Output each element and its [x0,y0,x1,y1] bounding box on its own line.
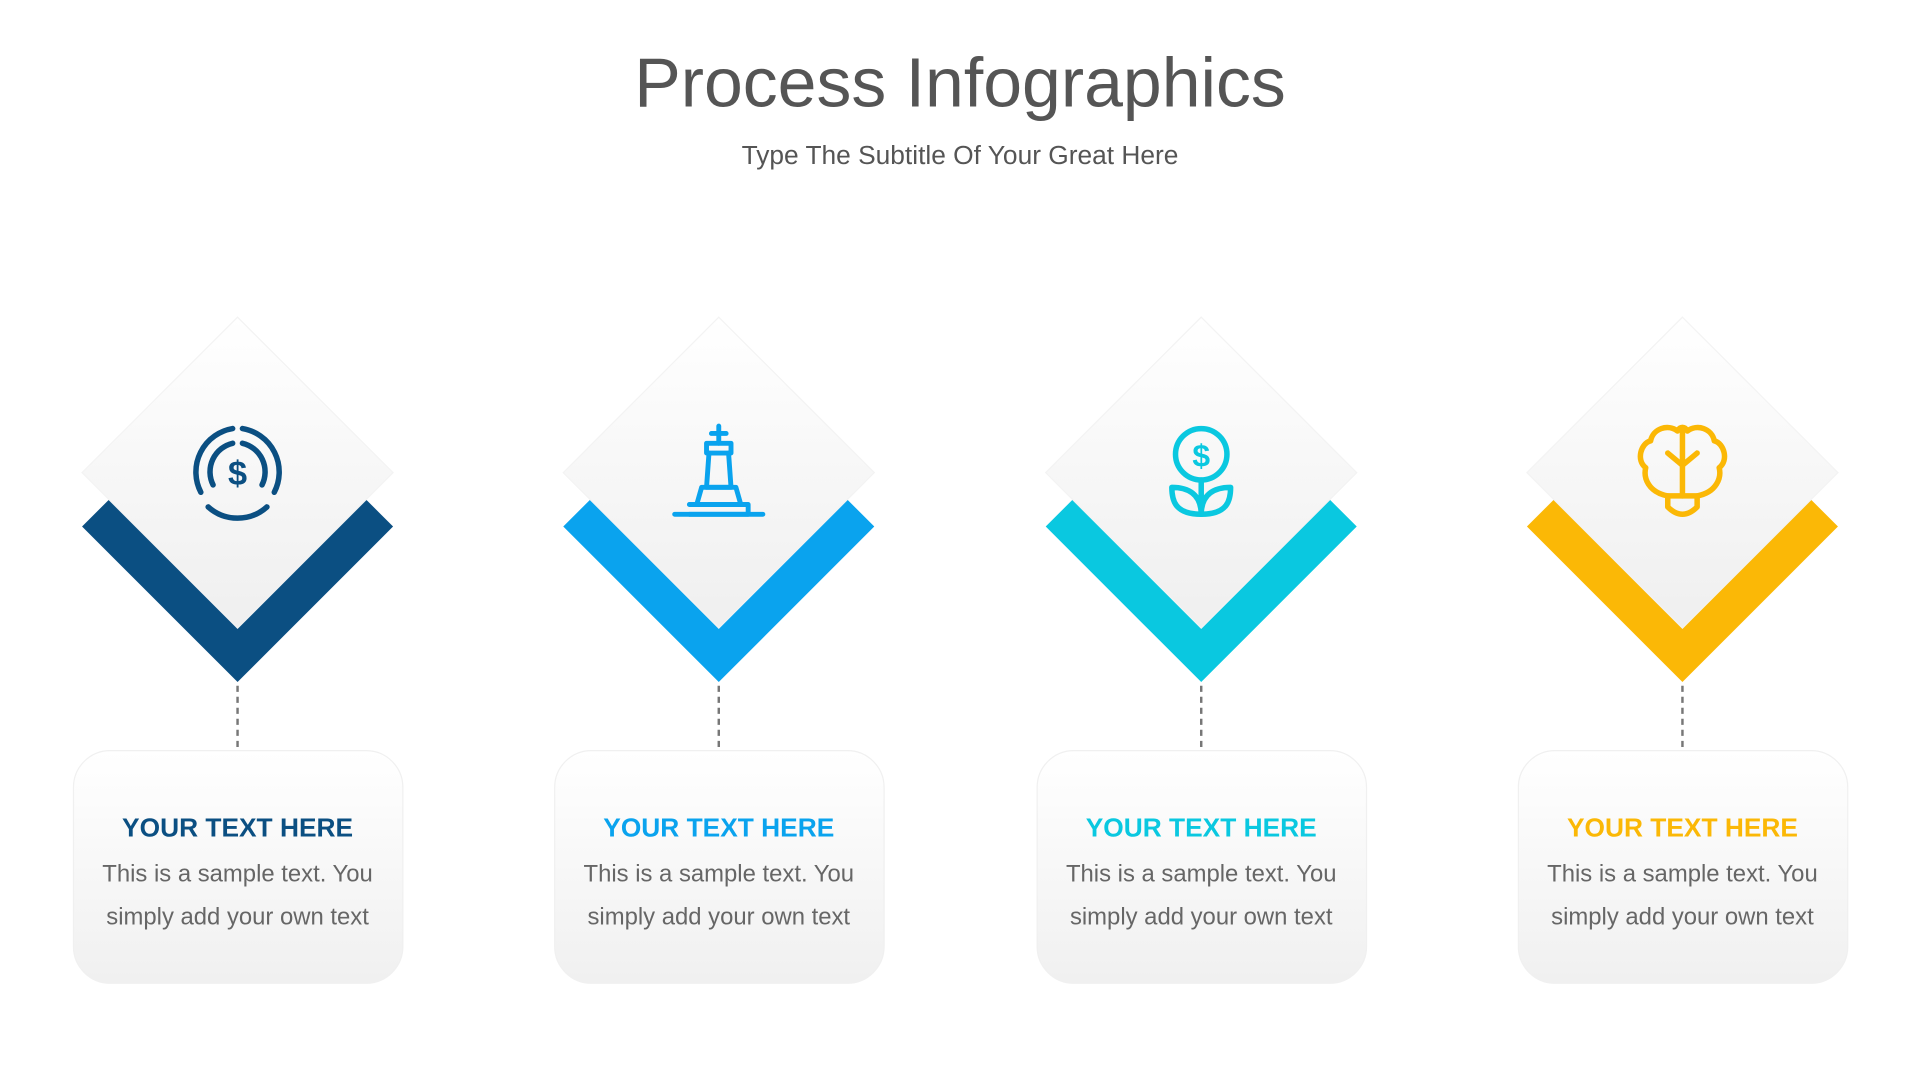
icon: money plant: $ [1192,438,1210,474]
connector 2 [718,686,720,749]
icon: brain bulb [1640,427,1725,514]
card 2 [555,751,884,983]
diamond 3 [1046,317,1357,628]
connector 1 [237,686,239,749]
card 1: YOUR TEXT HERE [122,812,353,842]
card 1: simply add your own text [106,903,369,930]
card 1 [73,751,403,983]
icon: money plant [1172,429,1231,514]
card 3: simply add your own text [1070,903,1333,930]
card 3 [1037,751,1367,983]
chevron 4 [1527,500,1838,682]
card 4: simply add your own text [1551,903,1814,930]
diamond 1 [82,317,393,628]
diamond 4 [1527,317,1838,628]
icon: chess king [675,426,763,514]
diamond 2 [563,317,874,628]
card 2: simply add your own text [587,903,850,930]
icon: dollar target: $ [228,455,247,493]
title: Process Infographics [634,44,1286,122]
card 1: This is a sample text. You [102,861,373,888]
card 2: YOUR TEXT HERE [603,812,834,842]
card 3: This is a sample text. You [1066,861,1337,888]
subtitle: Type The Subtitle Of Your Great Here [742,140,1178,170]
step 2 [555,317,884,983]
connector 4 [1681,686,1683,749]
card 4 [1518,751,1848,983]
icon: dollar target [196,429,279,518]
chevron 1 [82,500,393,682]
card 4: This is a sample text. You [1547,861,1818,888]
connector 3 [1200,686,1202,749]
card 4: YOUR TEXT HERE [1567,812,1798,842]
step 4 [1518,317,1848,983]
step 3 [1037,317,1367,983]
chevron 2 [563,500,874,682]
step 1 [73,317,403,983]
chevron 3 [1046,500,1357,682]
card 2: This is a sample text. You [583,861,854,888]
card 3: YOUR TEXT HERE [1086,812,1317,842]
